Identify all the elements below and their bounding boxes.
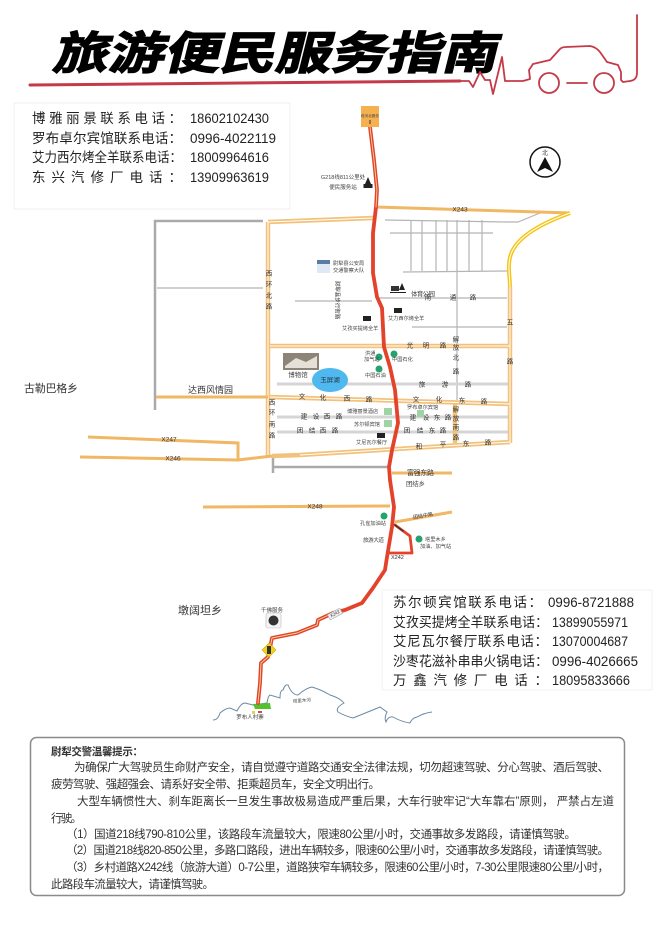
road name labels: 路 — [269, 431, 276, 440]
start marker box: 塔河北服务 — [361, 113, 379, 118]
road name labels: 建 — [301, 412, 308, 421]
hotel labels — [347, 403, 438, 428]
traffic police label: 交通警察大队 — [333, 266, 365, 274]
place labels: 富强东路 — [407, 468, 434, 477]
contact row: 艾孜买提烤全羊: 13899055971 — [552, 614, 628, 630]
contact row: 万鑫汽修厂: 18095833666 — [552, 672, 630, 688]
hotels — [384, 408, 424, 427]
tips heading: 尉犁交警温馨提示： — [51, 745, 143, 758]
road name labels: 和 — [416, 442, 422, 451]
contact row: 沙枣花滋补串串火锅: 沙枣花滋补串串火锅电话： — [393, 654, 548, 669]
park icon — [390, 283, 406, 292]
place labels: 古勒巴格乡 — [24, 381, 78, 395]
road name labels: 路 — [366, 395, 373, 404]
contact row: 苏尔顿宾馆: 苏尔顿宾馆联系电话： — [393, 595, 542, 610]
tips item 3: 此路段车流量较大，请谨慎驾驶。 — [51, 877, 214, 891]
contact row: 艾力西尔烤全羊 — [32, 149, 269, 165]
gas stations: 中国石化 — [392, 355, 413, 363]
hotel labels: 苏尔顿宾馆 — [354, 420, 380, 428]
contact row: 艾尼瓦尔餐厅: 艾尼瓦尔餐厅联系电话： — [393, 634, 548, 649]
contact row: 博雅丽景: 博雅丽景联系电话： — [32, 110, 182, 126]
panel: contact list top left — [14, 103, 290, 209]
road name labels: 通 — [450, 293, 457, 302]
museum — [283, 353, 319, 379]
road name labels: 文 — [299, 392, 306, 401]
destination label — [236, 711, 264, 721]
compass — [530, 147, 560, 177]
road name labels: 路 — [332, 426, 339, 435]
road name labels: 路 — [445, 413, 452, 422]
road name labels: 平 — [440, 441, 447, 449]
contact row: 沙枣花滋补串串火锅: 0996-4026665 — [552, 653, 638, 669]
road name labels: 路 — [507, 357, 514, 366]
panel: contact list bottom right — [382, 590, 652, 690]
contact row: 沙枣花滋补串串火锅 — [393, 653, 638, 669]
road name labels: 路 — [485, 438, 492, 447]
lake — [312, 368, 348, 392]
road name labels: 东 — [463, 439, 470, 448]
road name labels: 东 — [459, 396, 466, 405]
road name labels: 化 — [320, 393, 327, 402]
road name labels: 南 — [269, 420, 276, 429]
traffic police label: 尉犁县公安局 — [333, 259, 364, 267]
place labels: 达西风情园 — [188, 384, 233, 395]
road name labels: 旅 — [419, 380, 426, 389]
toll station icon: 千佛服务 — [261, 606, 283, 614]
orange road network — [80, 207, 570, 522]
road name labels: 西 — [344, 395, 351, 403]
road name labels: 放 — [453, 343, 460, 352]
contact row: 艾尼瓦尔餐厅 — [393, 633, 628, 649]
road name labels — [266, 270, 514, 521]
river label: 塔里木河 — [293, 696, 312, 705]
contact row: 艾孜买提烤全羊 — [393, 614, 628, 630]
title: 旅游便民服务指南 — [50, 29, 507, 79]
toll station icon — [261, 606, 283, 628]
panel: traffic police safety tips — [30, 738, 624, 896]
place labels: 旅游大道 — [363, 536, 384, 544]
road name labels: 东 — [434, 413, 441, 422]
compass: 北 — [542, 149, 548, 157]
road name labels: 北 — [266, 292, 273, 300]
map — [24, 106, 570, 723]
road name labels: 西 — [320, 427, 327, 435]
road name labels: 财犁县步行街路 — [334, 281, 342, 320]
road name labels: 光 — [407, 341, 414, 350]
road name labels: 游 — [442, 380, 449, 389]
contact row: 博雅丽景 — [32, 110, 269, 126]
road badge X242: X242 — [329, 609, 341, 618]
road name labels: 南 — [425, 293, 432, 302]
contact row: 东兴汽修厂 — [32, 169, 269, 185]
contact row: 罗布卓尔宾馆: 罗布卓尔宾馆联系电话： — [32, 131, 182, 146]
place labels: 体育公园 — [411, 289, 435, 298]
hotel labels: 罗布卓尔宾馆 — [407, 403, 438, 411]
gas stations: 孔雀加油站 — [360, 519, 386, 527]
place labels: X246 — [165, 456, 181, 463]
contact row: 艾力西尔烤全羊: 18009964616 — [190, 149, 269, 165]
hotel labels: 博雅丽景酒店 — [347, 407, 378, 415]
header line with pulse and car — [30, 15, 637, 94]
gas stations: 加油、加气站 — [420, 542, 451, 550]
road name labels: 路 — [336, 412, 343, 421]
road name labels: 文 — [413, 395, 420, 404]
contact row: 艾力西尔烤全羊: 艾力西尔烤全羊联系电话： — [32, 149, 182, 165]
place labels — [24, 207, 468, 617]
tips paragraph 1: 疲劳驾驶、强超强会、请系好安全带、拒乘超员车，安全文明出行。 — [51, 777, 380, 791]
gas stations — [360, 349, 451, 550]
restaurants: 艾尼瓦尔餐厅 — [356, 438, 387, 446]
gas stations: 洪通 — [365, 349, 376, 357]
road name labels: 环 — [266, 281, 273, 289]
restaurants: 艾力西尔烤全羊 — [388, 314, 424, 322]
contact row: 万鑫汽修厂 — [393, 672, 630, 688]
tips item 1: （1）国道218线790-810公里，该路段车流量较大，限速80公里/小时，交通事故多发路段，请谨慎驾驶。 — [66, 827, 576, 841]
destination label: 罗布人村寨 — [236, 713, 264, 721]
road name labels: 团 — [404, 427, 410, 435]
road name labels: 化 — [436, 395, 443, 404]
museum: 博物馆 — [288, 370, 308, 379]
tips paragraph 1 — [51, 760, 609, 791]
main route in red — [258, 127, 412, 703]
contact row: 万鑫汽修厂: 万鑫汽修厂电话： — [393, 672, 548, 688]
place labels: X248 — [307, 504, 323, 511]
road name labels: 路 — [266, 302, 273, 311]
place labels: 墩阔坦乡 — [178, 603, 222, 617]
tips paragraph 2: 大型车辆惯性大、刹车距离长一旦发生事故极易造成严重后果，大车行驶牢记“大车靠右”原则， 严禁占左道 — [77, 794, 614, 808]
road name labels: 团结中路 — [413, 511, 433, 521]
road name labels: 结 — [309, 426, 316, 435]
road name labels: 团 — [297, 427, 303, 435]
lake: 玉屏湖 — [320, 375, 340, 384]
road name labels: 路 — [481, 397, 488, 406]
gas stations: 中国石油 — [365, 371, 386, 379]
traffic police label — [317, 259, 365, 274]
road name labels: 西 — [324, 413, 331, 421]
road name labels: 路 — [465, 380, 472, 389]
place labels: 团结乡 — [406, 479, 425, 488]
tips paragraph 2 — [51, 794, 614, 825]
place labels: X247 — [161, 437, 177, 444]
service station label: G218线811公里处 — [321, 173, 366, 181]
place labels: X242 — [391, 555, 404, 561]
road name labels: 西 — [266, 270, 273, 278]
road name labels: 结 — [417, 426, 424, 435]
road name labels: 设 — [313, 412, 320, 421]
warning diamond — [262, 643, 276, 657]
tips paragraph 1: 为确保广大驾驶员生命财产安全，请自觉遵守道路交通安全法律法规，切勿超速驾驶、分心驾驶、酒后驾驶、 — [74, 760, 609, 774]
road name labels: 西 — [269, 399, 276, 407]
road name labels: 路 — [440, 426, 447, 435]
road badge X242 — [327, 608, 343, 620]
road name labels: 解 — [453, 335, 460, 344]
restaurants — [342, 308, 424, 446]
road name labels: 东 — [429, 426, 436, 435]
start marker box — [361, 106, 379, 127]
contact row: 东兴汽修厂: 13909963619 — [190, 169, 269, 185]
road name labels: 路 — [453, 367, 460, 376]
contact row: 苏尔顿宾馆 — [393, 594, 634, 610]
service station label — [321, 173, 372, 191]
tips item 2: （2）国道218线820-850公里，多路口路段，进出车辆较多，限速60公里/小时，交通事故多发路段，请谨慎驾驶。 — [66, 843, 609, 857]
road name labels: 路 — [440, 341, 447, 350]
contact row: 艾尼瓦尔餐厅: 13070004687 — [552, 633, 628, 649]
tips item 3 — [51, 860, 609, 891]
road name labels: 环 — [269, 409, 276, 417]
scenic green area — [253, 703, 271, 709]
tips paragraph 2: 行驶。 — [51, 811, 82, 825]
road name labels: 路 — [453, 433, 460, 442]
gas stations: 塔里木乡 — [425, 535, 446, 543]
road name labels: 路 — [470, 293, 477, 302]
road name labels: 明 — [423, 342, 430, 350]
service station label: 便民服务站 — [329, 183, 357, 191]
road name labels: 南 — [453, 423, 460, 432]
road name labels: 解 — [453, 405, 460, 414]
grey street network — [155, 213, 540, 473]
road name labels: 设 — [423, 413, 430, 422]
contact row: 苏尔顿宾馆: 0996-8721888 — [548, 594, 634, 610]
road name labels: 建 — [410, 413, 417, 422]
contact row: 罗布卓尔宾馆: 0996-4022119 — [190, 130, 276, 146]
contact row: 博雅丽景: 18602102430 — [190, 110, 269, 126]
contact row: 东兴汽修厂: 东兴汽修厂电话： — [32, 170, 182, 185]
road name labels: 放 — [453, 414, 460, 423]
river — [213, 685, 432, 723]
gas stations: 加气站 — [364, 355, 380, 363]
place labels: X243 — [452, 207, 468, 214]
contact row: 艾孜买提烤全羊: 艾孜买提烤全羊联系电话： — [393, 614, 548, 630]
tips item 3: （3）乡村道路X242线（旅游大道）0-7公里，道路狭窄车辆较多，限速60公里/小时，7-30公里限速80公里/小时， — [66, 860, 609, 874]
road name labels: 北 — [453, 354, 460, 362]
contact row: 罗布卓尔宾馆 — [32, 130, 276, 146]
road name labels: 五 — [507, 319, 514, 327]
restaurants: 艾孜买提烤全羊 — [342, 324, 378, 332]
